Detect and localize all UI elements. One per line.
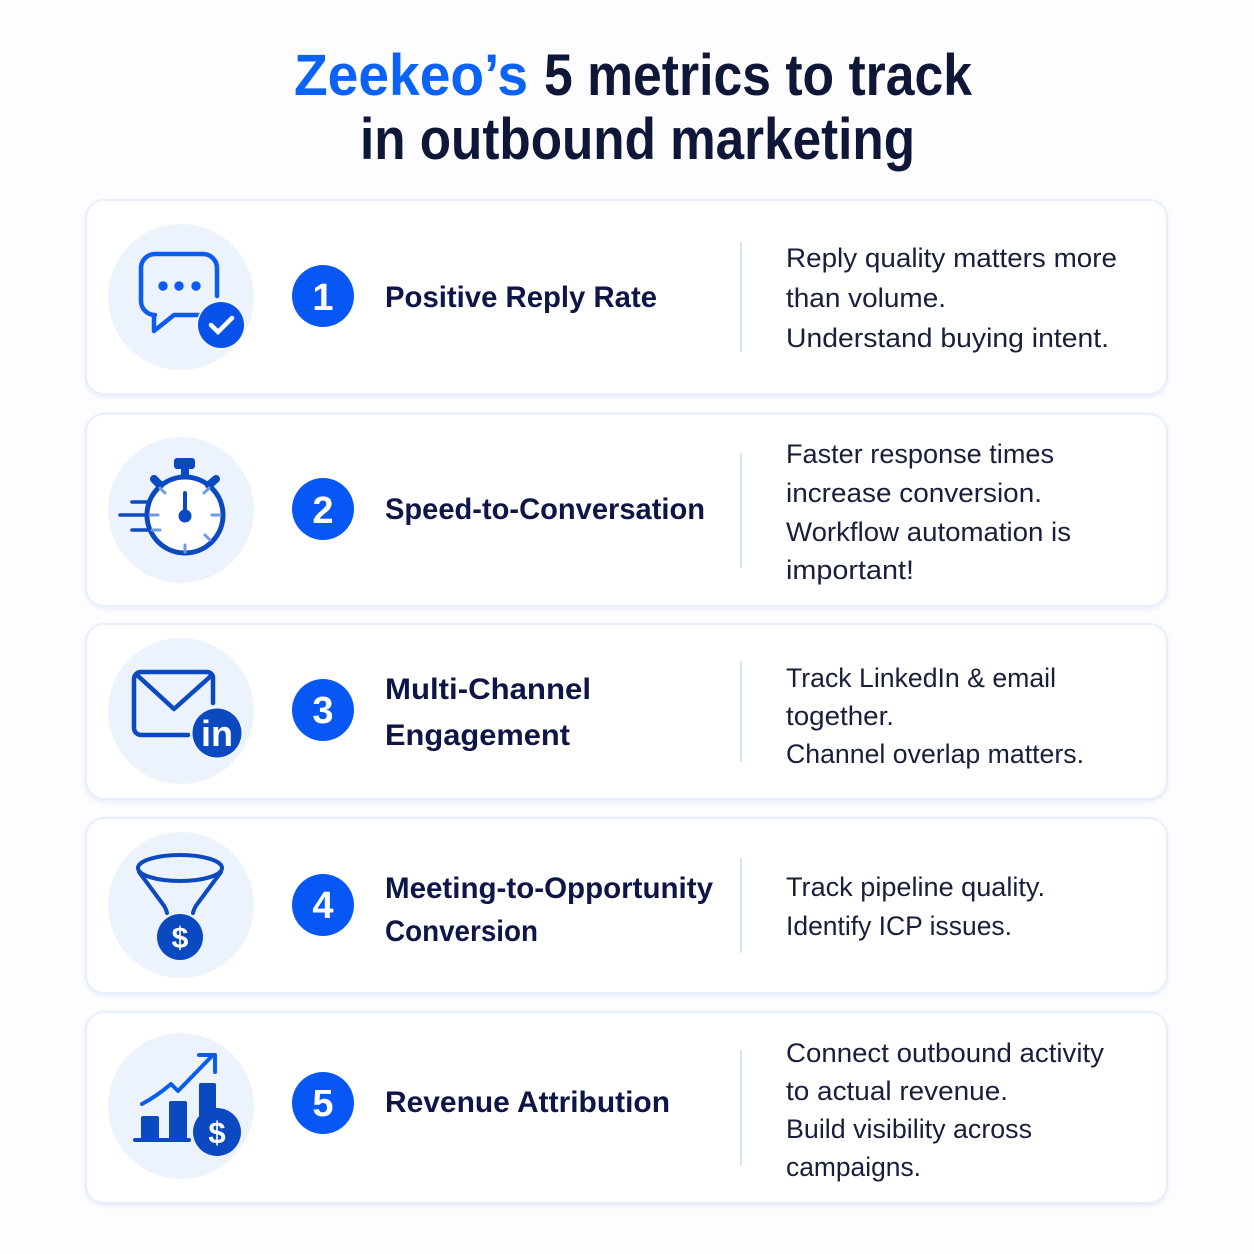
heading (385, 673, 591, 752)
panel: metric 4 meeting-to-opportunity conversion (86, 818, 1167, 993)
description: Faster response times (786, 439, 1054, 469)
panel: metric 2 speed-to-conversation (86, 414, 1167, 606)
icon: growth chart with dollar coin: $ (208, 1115, 226, 1150)
number 5 (292, 1072, 354, 1134)
description (786, 243, 1117, 353)
description: important! (786, 555, 914, 585)
heading: Meeting-to-Opportunity (385, 872, 713, 905)
title: 5 metrics to track (544, 43, 973, 108)
title: in outbound marketing (360, 107, 915, 172)
number 2 (292, 478, 354, 540)
icon: funnel with dollar coin: $ (172, 922, 189, 955)
title: Zeekeo’s (294, 43, 528, 108)
number 1: 1 (312, 277, 334, 319)
description: Workflow automation is (786, 517, 1071, 547)
number 4: 4 (312, 885, 334, 927)
description: Understand buying intent. (786, 323, 1109, 353)
heading: Revenue Attribution (385, 1086, 670, 1119)
icon: chat bubble with check (108, 224, 254, 370)
heading: Speed-to-Conversation (385, 493, 705, 526)
description: than volume. (786, 283, 946, 313)
description (786, 1038, 1105, 1182)
description: together. (786, 701, 894, 731)
description (786, 872, 1045, 941)
number 3 (292, 679, 354, 741)
icon: growth chart with dollar coin (108, 1033, 254, 1179)
icon: stopwatch (108, 437, 254, 583)
panel: metric 3 multi-channel engagement (86, 624, 1167, 799)
description: Identify ICP issues. (786, 911, 1012, 941)
panel: metric 5 revenue attribution (86, 1012, 1167, 1203)
icon: envelope with LinkedIn badge (108, 638, 254, 784)
icon: envelope with LinkedIn badge: in (201, 713, 233, 754)
icon: funnel with dollar coin (108, 832, 254, 978)
title (294, 43, 973, 172)
heading (385, 872, 713, 948)
heading: Engagement (385, 719, 570, 752)
number 5: 5 (312, 1083, 334, 1125)
description: Channel overlap matters. (786, 739, 1084, 769)
panel: metric 1 positive reply rate (86, 200, 1167, 394)
number 1 (292, 265, 354, 327)
description: increase conversion. (786, 478, 1042, 508)
heading: Positive Reply Rate (385, 281, 657, 314)
heading: Conversion (385, 915, 538, 948)
description: to actual revenue. (786, 1076, 1008, 1106)
description (786, 439, 1071, 585)
number 4 (292, 874, 354, 936)
number 2: 2 (312, 490, 334, 532)
description: campaigns. (786, 1152, 921, 1182)
description: Track pipeline quality. (786, 872, 1045, 902)
description (786, 663, 1084, 769)
description: Track LinkedIn & email (786, 663, 1056, 693)
description: Build visibility across (786, 1114, 1032, 1144)
heading: Multi-Channel (385, 673, 591, 706)
number 3: 3 (312, 690, 334, 732)
description: Connect outbound activity (786, 1038, 1105, 1068)
description: Reply quality matters more (786, 243, 1117, 273)
